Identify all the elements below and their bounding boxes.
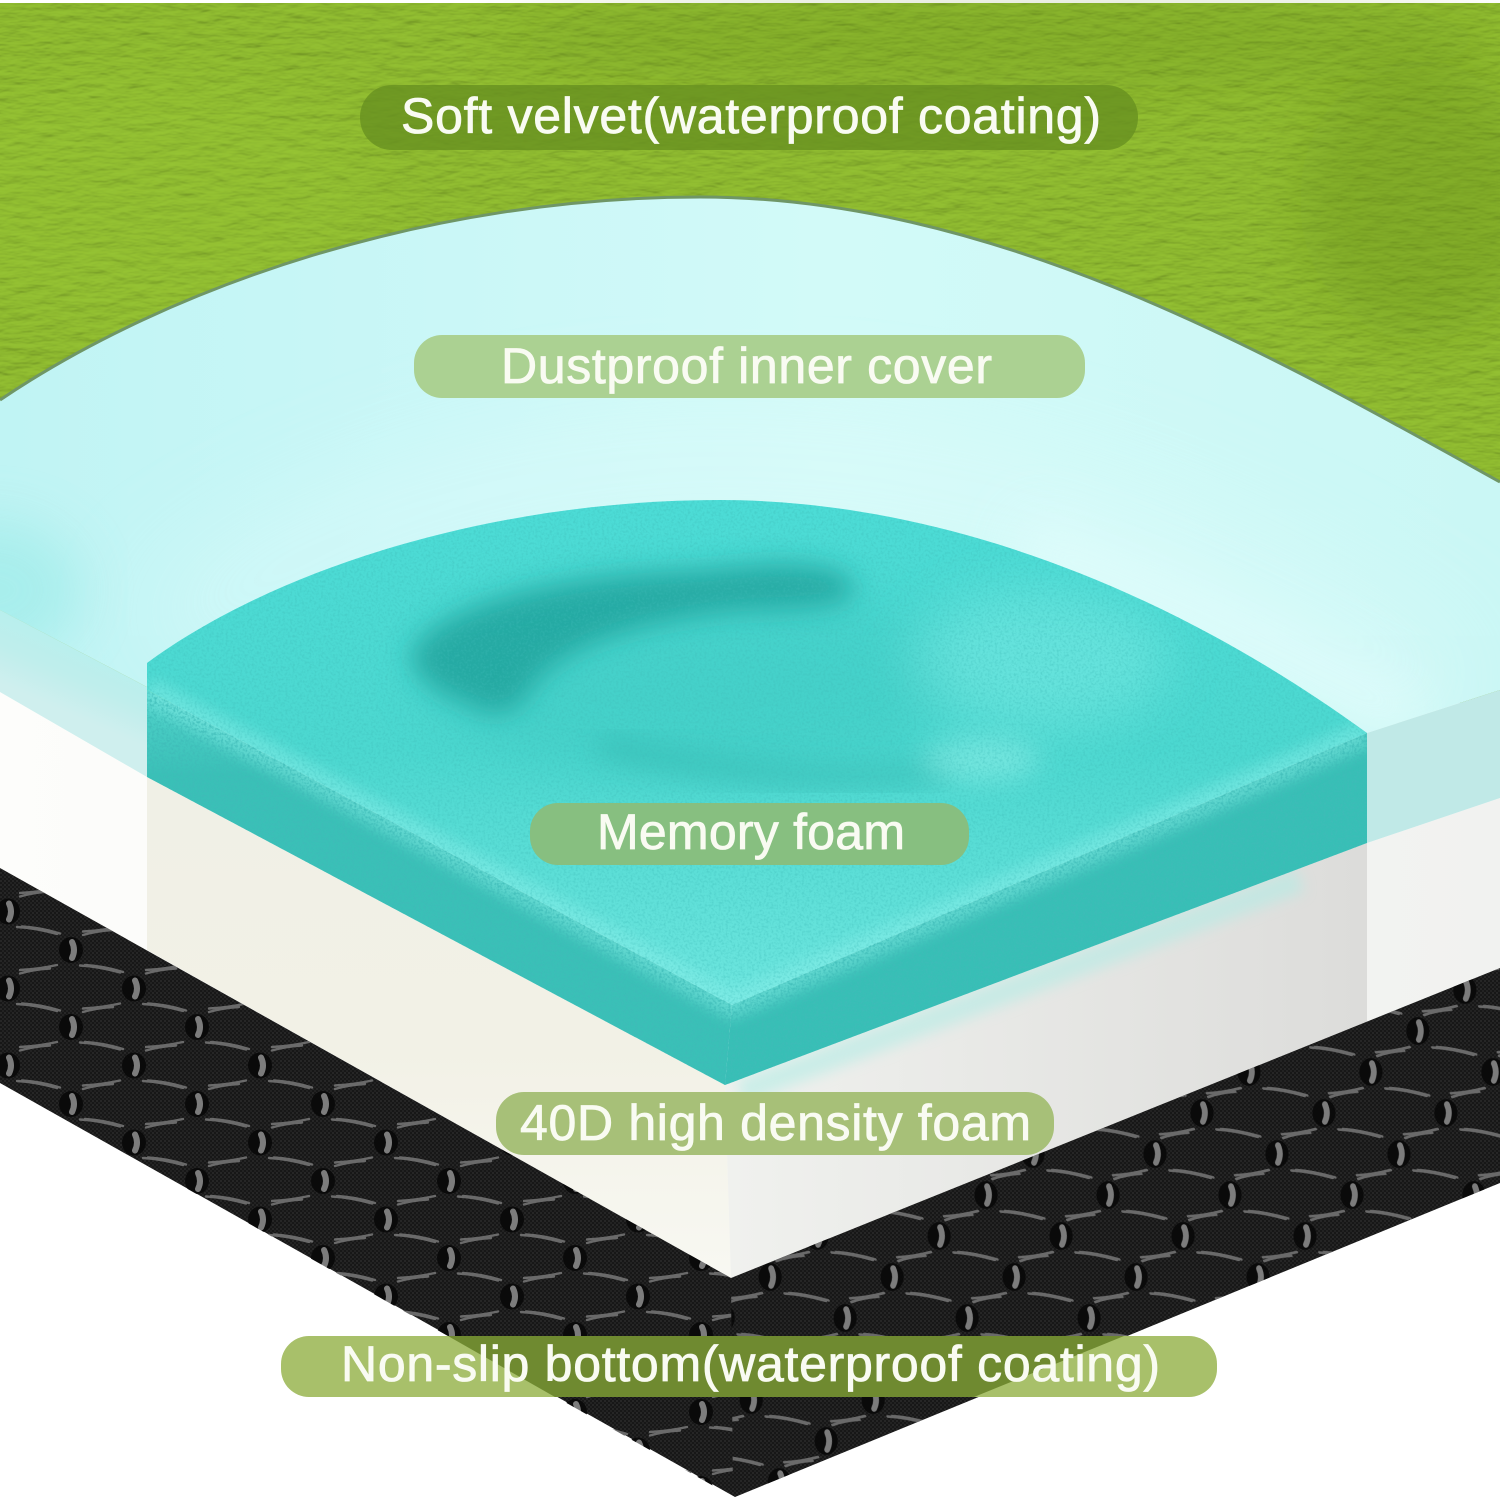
panel: cover side bands <box>0 610 1500 843</box>
panel: green velvet top layer <box>0 0 1500 703</box>
panel: memory foam <box>147 500 1367 1085</box>
label: dustproof inner cover <box>414 335 1085 398</box>
label: memory foam <box>530 803 969 865</box>
label: dustproof inner cover: Dustproof inner cover <box>501 338 992 394</box>
body impression shadows <box>410 564 1170 782</box>
panel: non-slip black base <box>0 868 1500 1497</box>
pill section over black base <box>448 1336 1124 1397</box>
label: 40D high density foam: 40D high density foam <box>520 1095 1031 1151</box>
label: memory foam: Memory foam <box>597 804 905 860</box>
panel: white foam outer background <box>0 690 1500 1300</box>
dome shadow edge <box>0 197 1500 482</box>
panel: 40D foam block <box>147 777 1367 1278</box>
panel: dustproof inner cover <box>0 197 1500 733</box>
label: soft velvet: Soft velvet(waterproof coating) <box>401 88 1101 144</box>
label: non-slip bottom: Non-slip bottom(waterproof coating) <box>341 1336 1160 1392</box>
